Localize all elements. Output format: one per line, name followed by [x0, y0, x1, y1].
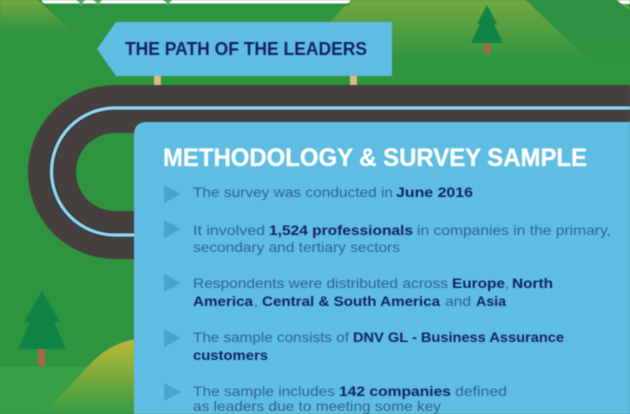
bullet 3 [164, 274, 553, 309]
road [52, 108, 630, 235]
bullet 3: , [505, 275, 509, 291]
panel: methodology and survey sample [134, 122, 630, 414]
bullet 4: DNV GL - Business Assurance [353, 329, 564, 345]
bullet 2 [164, 220, 611, 255]
bullet 2: secondary and tertiary sectors [193, 239, 400, 255]
bullet 3: Respondents were distributed across [193, 275, 448, 291]
sign text: THE PATH OF THE LEADERS [125, 39, 367, 59]
top white panel [42, 0, 350, 6]
bullet 3: Central & South America [262, 293, 440, 309]
bullet 3: America [193, 293, 253, 309]
bullet 5: The sample includes [193, 383, 335, 399]
bullet 3: North [512, 275, 553, 291]
tree right [471, 5, 503, 54]
sign: the path of the leaders [97, 22, 392, 76]
bullet 4: The sample consists of [193, 329, 349, 345]
bullet 2: in companies in the primary, [417, 222, 611, 238]
yellow hill [42, 339, 136, 414]
small trees [76, 0, 172, 6]
bullet 1: The survey was conducted in [193, 184, 393, 200]
bullet 5 [164, 383, 507, 414]
bullet 3: , [254, 293, 258, 309]
bullet 5: 142 companies [339, 383, 451, 399]
tree left [18, 291, 66, 366]
sign posts [154, 76, 357, 86]
bullet 2: It involved [193, 222, 265, 238]
bullet 3: Europe [452, 275, 505, 291]
bullet 4 [164, 329, 564, 363]
mountains [0, 0, 630, 62]
bullet 1 [164, 184, 473, 203]
bullet 5: defined [455, 383, 507, 399]
lower ground [0, 367, 134, 414]
top right panel corner [618, 0, 630, 4]
bullet 3: Asia [476, 293, 506, 309]
bullet 3: and [445, 293, 471, 309]
heading: METHODOLOGY & SURVEY SAMPLE [163, 144, 587, 172]
bullet 2: 1,524 professionals [269, 222, 413, 238]
bullet 1: June 2016 [396, 184, 473, 200]
bullet 5: as leaders due to meeting some key [193, 398, 441, 414]
bullet 4: customers [193, 347, 268, 363]
